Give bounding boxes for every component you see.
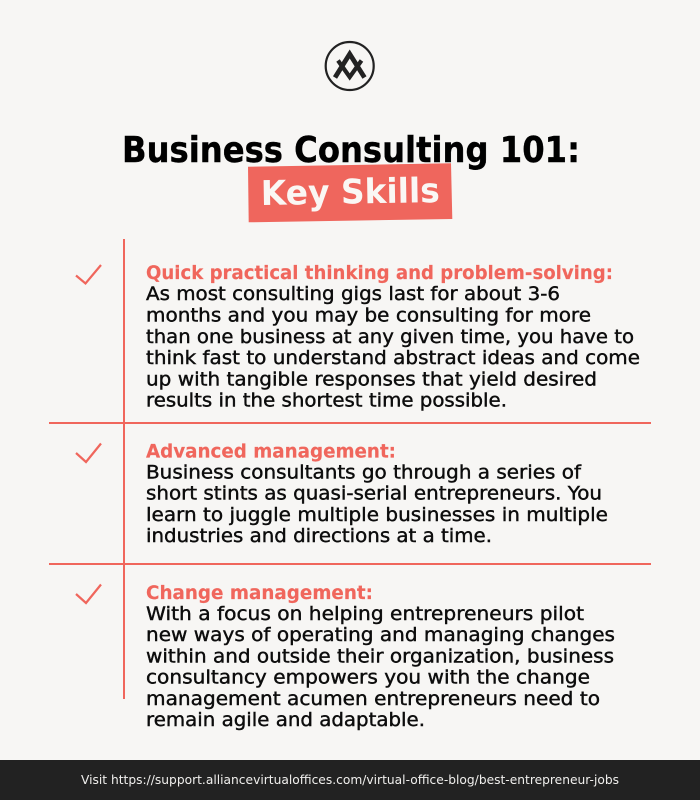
icon: check mark two bbox=[76, 444, 101, 462]
text block: quick practical thinking: than one business at any given time, you have to bbox=[146, 327, 634, 348]
text block: change management: new ways of operating and managing changes bbox=[146, 625, 615, 646]
text block: quick practical thinking bbox=[146, 284, 640, 412]
text block: advanced management bbox=[146, 462, 608, 547]
text block: quick practical thinking: results in the shortest time possible. bbox=[146, 390, 507, 412]
icon: check mark one bbox=[76, 265, 101, 284]
heading: change management: Change management: bbox=[146, 582, 373, 604]
text block: quick practical thinking: think fast to understand abstract ideas and come bbox=[146, 348, 640, 369]
text block: change management: consultancy empowers you with the change bbox=[146, 668, 590, 689]
icon: logo bbox=[326, 42, 374, 90]
title: Business Consulting 101: bbox=[122, 130, 580, 171]
vertical divider bbox=[123, 239, 125, 699]
horizontal divider two bbox=[49, 563, 651, 565]
text block: quick practical thinking: up with tangible responses that yield desired bbox=[146, 369, 597, 390]
text block: advanced management: short stints as quasi-serial entrepreneurs. You bbox=[146, 484, 602, 504]
text block: change management: remain agile and adaptable. bbox=[146, 710, 425, 731]
footer bar bbox=[0, 760, 700, 800]
skill row: change management bbox=[76, 582, 615, 731]
skill row: quick practical thinking bbox=[76, 262, 640, 412]
text block: change management: management acumen entrepreneurs need to bbox=[146, 689, 600, 710]
icon: check mark three bbox=[76, 584, 101, 603]
heading: advanced management: Advanced management: bbox=[146, 440, 396, 462]
text block: quick practical thinking: months and you may be consulting for more bbox=[146, 306, 591, 326]
text block: advanced management: industries and directions at a time. bbox=[146, 526, 492, 547]
text block: quick practical thinking: As most consulting gigs last for about 3-6 bbox=[146, 284, 560, 305]
title badge: key skills: Key Skills bbox=[260, 171, 440, 214]
horizontal divider one bbox=[49, 422, 651, 424]
text block: advanced management: learn to juggle multiple businesses in multiple bbox=[146, 505, 608, 526]
text block: change management bbox=[146, 604, 615, 731]
title badge: key skills bbox=[248, 163, 452, 222]
skill row: advanced management bbox=[76, 440, 608, 547]
footer source link: Visit https://support.alliancevirtualoffices.com/virtual-office-blog/best-entrepreneur-jobs bbox=[81, 773, 619, 787]
text block: advanced management: Business consultants go through a series of bbox=[146, 462, 581, 484]
heading: quick practical thinking: Quick practical thinking and problem-solving: bbox=[146, 262, 613, 284]
text block: change management: within and outside their organization, business bbox=[146, 646, 614, 667]
text block: change management: With a focus on helping entrepreneurs pilot bbox=[146, 604, 584, 625]
